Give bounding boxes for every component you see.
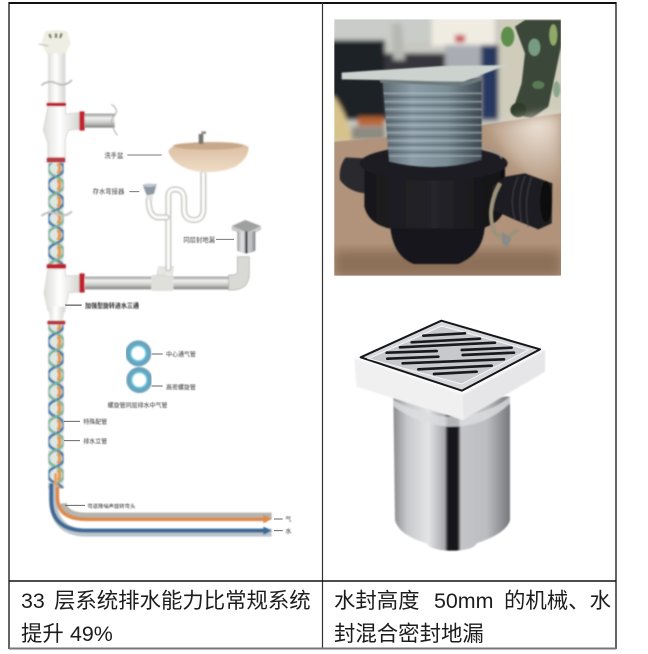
square top [354,320,545,420]
caption: left column [21,589,311,646]
labels: upper diagram [85,151,215,310]
caption: right column: 封混合密封地漏 [334,622,484,646]
upper branch fitting [43,104,117,163]
photo: chrome floor drain [354,320,545,551]
grate slots [387,333,514,374]
threaded body [382,78,482,167]
caption: left column: 49% [70,622,113,646]
label: air: 气 [285,515,291,523]
label: fitting: 加强型旋转进水三通 [85,302,139,310]
label: basin: 洗手盆 [104,151,124,160]
plant [501,20,561,118]
caption: left column: 33 [21,589,45,613]
label: spiral tube: 高密螺旋管 [166,383,196,391]
panel: drainage system diagram [39,30,261,312]
label: fitting: 加强型旋转进水三通 [85,302,139,310]
leader lines [64,305,283,531]
leader lines [66,155,234,305]
photo background [325,10,572,277]
right threaded outlet and clamp [491,173,552,247]
label: floor drain: 同层封地漏 [183,235,215,244]
icon: wash basin [168,131,249,172]
flow arrows [263,515,272,535]
chrome cylinder [393,397,510,551]
icon: vent cap [39,30,71,55]
caption: right column: 的机械、水 [504,589,611,613]
vertical waste pipes and trap [149,173,203,268]
label: drain stack: 排水立管 [83,437,107,445]
square top plate [342,65,507,86]
caption: left column: 层系统排水能力比常规系统 [54,589,311,613]
label: special piping: 特殊配管 [83,418,107,426]
grate inner plate [368,326,528,384]
table [325,112,572,277]
caption: left column: 提升 [21,622,64,646]
icon: cross-section rings [128,343,149,390]
caption: right column: 50mm [434,589,493,613]
caption: right column: 水封高度 [334,589,420,613]
label: core tube: 中心通气管 [166,351,196,359]
labels: lower diagram [83,302,291,535]
label: water: 水 [285,527,291,535]
label: elbow: 弯道降噪声旋转弯头 [87,502,136,510]
black housing [340,146,508,228]
caption: right column [334,589,611,646]
upper stack pipe [41,53,72,106]
label: connector: 存水弯接器 [93,187,125,196]
icon: small floor drain connector [143,184,157,200]
braided pipe upper [41,163,72,269]
black lower pot [390,223,485,264]
horizontal drain pipe with elbow [85,257,249,291]
horizontal air and water flow [51,473,272,533]
photo: black mechanical floor drain [325,10,572,277]
grate [361,321,540,391]
icon: same-floor floor drain [232,220,261,253]
label: section caption: 螺旋管同层排水中气管 [108,401,168,409]
lower fitting [44,269,85,312]
panel: lower diagram [47,302,291,535]
braided pipe lower [47,307,65,488]
